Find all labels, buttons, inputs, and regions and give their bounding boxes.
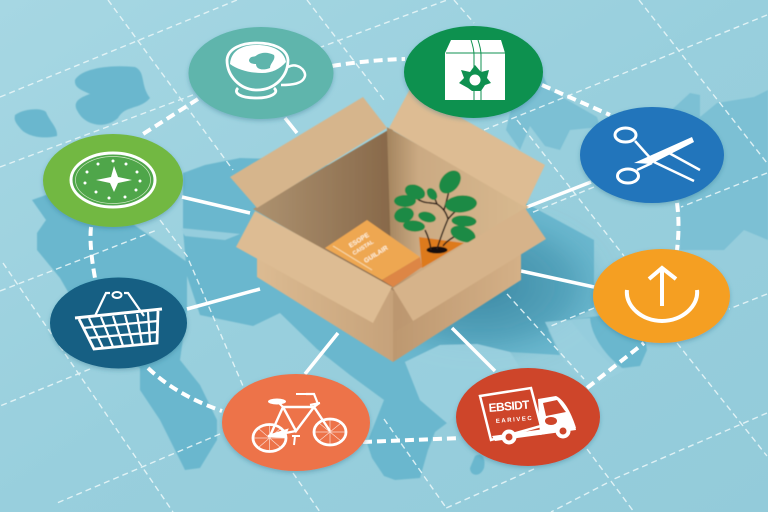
small orange product box with label: CAISTAL — [352, 239, 376, 257]
map continents — [15, 66, 768, 480]
shaded area under the box — [350, 207, 610, 363]
circle: coffee cup — [188, 27, 334, 119]
icon: coffee cup — [227, 43, 305, 98]
icon: delivery truck: EARIVEC — [496, 416, 533, 425]
small orange product box with label — [325, 220, 422, 287]
icon: bicycle — [253, 394, 346, 452]
lighter land patches — [180, 228, 625, 423]
small orange product box with label: GUILAIR — [363, 245, 390, 265]
circle: green parcel — [404, 26, 543, 118]
icon: parcel with leaf — [445, 40, 505, 100]
box outer walls — [257, 215, 521, 362]
box interior — [255, 129, 527, 289]
back flaps — [230, 89, 545, 208]
upper-right continent — [660, 90, 768, 250]
plant in orange pot — [392, 166, 478, 268]
islands near green circle — [506, 70, 600, 150]
icon: upload arrow — [627, 268, 697, 321]
front flaps — [236, 208, 546, 333]
circle: orange upload — [593, 249, 730, 343]
circle: green compass — [43, 134, 183, 227]
icon: compass — [71, 153, 155, 207]
central open cardboard box — [230, 89, 546, 362]
spokes: solid lines from box to circles — [182, 118, 594, 374]
route: dashed ring linking the circles — [90, 59, 678, 442]
small orange product box with label: ESOPE — [348, 231, 371, 250]
icon: shopping basket — [75, 292, 162, 349]
circle: red delivery truck — [456, 368, 600, 466]
icon: delivery truck: EBSIDT — [488, 397, 531, 415]
icon: delivery truck — [480, 388, 576, 444]
circle: shopping basket — [50, 278, 187, 368]
circle: blue scissors — [580, 107, 724, 203]
circle: bicycle — [222, 374, 370, 471]
icon: scissors — [615, 128, 700, 183]
